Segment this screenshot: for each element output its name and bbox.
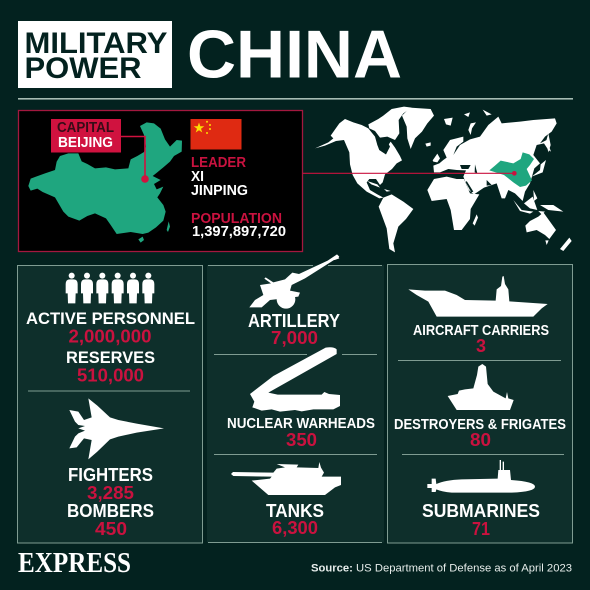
text: active personnel: 2,000,000 [68,326,152,346]
text: artillery: ARTILLERY [248,311,340,331]
text: nuclear warheads [227,416,375,450]
icon: fighter jet [69,398,164,459]
icon: aircraft carrier [408,276,548,317]
connector: panel to china [303,171,517,176]
text: bombers [67,501,154,539]
title badge: military power: MILITARY [24,27,168,60]
text: submarines [422,501,540,539]
callout: capital beijing [51,119,149,183]
land masses [315,107,572,260]
text: tanks: 6,300 [272,518,318,538]
panel: ground forces [207,254,384,543]
text: tanks: TANKS [266,501,324,521]
text: leader: JINPING [191,183,248,199]
icon: tank [231,462,341,495]
text: active personnel [26,309,195,346]
map: china with capital marker [28,122,182,243]
inland seas and gaps [377,142,492,192]
world map [303,107,572,260]
text: destroyers and frigates: 80 [470,430,491,450]
text: aircraft carriers [413,323,549,356]
source note: Source: US Department of Defense as of April 2023 [311,562,572,574]
icon: submarine [427,460,535,493]
text: leader: XI [191,169,204,185]
logo: express: EXPRESS [18,547,131,579]
text: fighters: FIGHTERS [68,465,153,485]
text: leader: LEADER [191,155,246,171]
title [18,16,402,92]
title badge: military power: POWER [24,52,142,85]
text: leader [191,155,248,199]
text: artillery: 7,000 [271,328,318,348]
text: bombers: 450 [95,519,127,539]
text: aircraft carriers: AIRCRAFT CARRIERS [413,323,549,339]
title badge: military power [18,21,172,88]
text: nuclear warheads: NUCLEAR WARHEADS [227,416,375,432]
text: tanks [266,501,324,538]
text: nuclear warheads: 350 [286,430,317,450]
icon: missile launcher [250,347,340,412]
text: reserves [66,348,155,386]
text: population [191,211,286,240]
text: submarines: SUBMARINES [422,501,540,521]
icon: personnel [66,273,154,303]
text: submarines: 71 [472,519,490,539]
icon: artillery [249,254,339,309]
text: destroyers and frigates: DESTROYERS & FRIGATES [394,417,566,433]
icon: destroyer [448,364,514,410]
text: population: 1,397,897,720 [192,224,286,240]
callout: capital beijing: CAPITAL [57,120,114,136]
panel: personnel and aircraft [18,266,202,543]
text: destroyers and frigates [394,417,566,450]
panel: china profile [18,110,302,252]
text: active personnel: ACTIVE PERSONNEL [26,309,195,328]
icon: china flag [190,119,242,150]
china highlight [489,152,534,187]
text: fighters: 3,285 [87,483,134,503]
text: artillery [248,311,340,348]
text: bombers: BOMBERS [67,501,154,521]
text: fighters [68,465,153,503]
text: reserves: 510,000 [77,366,144,386]
callout: capital beijing: BEIJING [58,135,113,151]
text: aircraft carriers: 3 [476,336,486,356]
text: reserves: RESERVES [66,348,155,367]
heading: china: CHINA [187,16,402,92]
panel: naval forces [388,264,572,543]
text: population: POPULATION [191,211,282,227]
